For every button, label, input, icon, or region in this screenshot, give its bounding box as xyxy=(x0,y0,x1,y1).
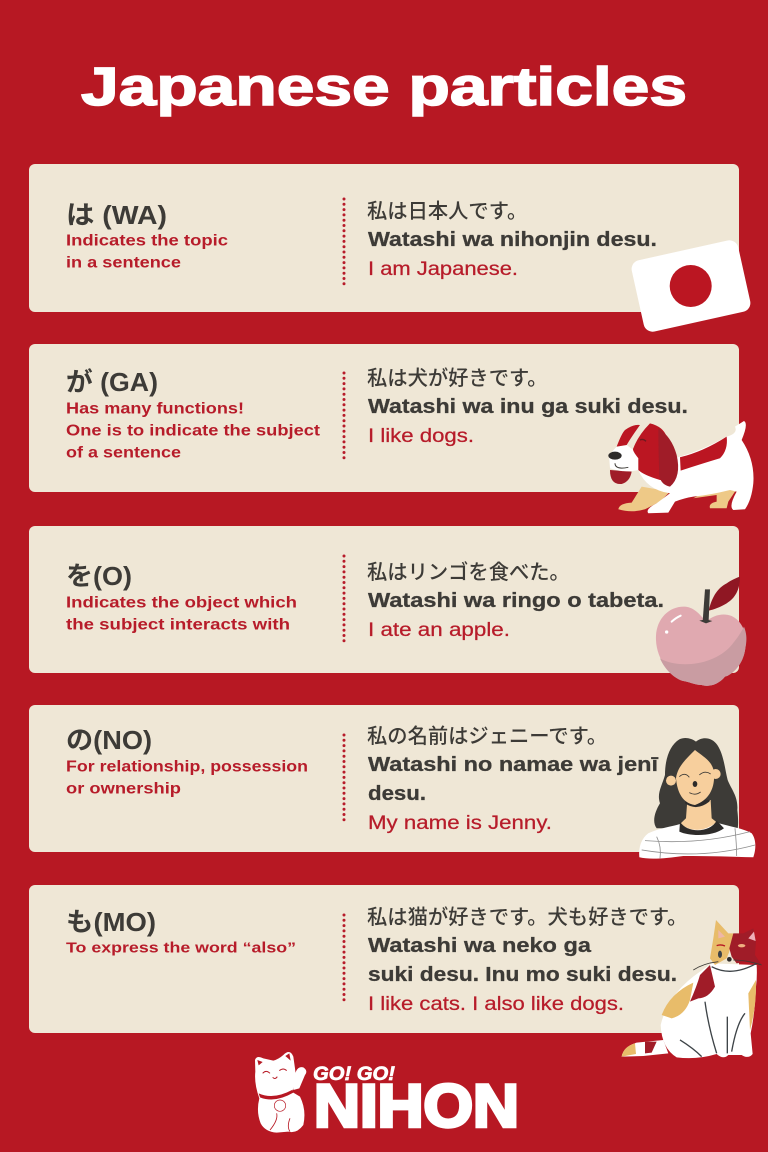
panel: ga particle xyxy=(29,344,739,492)
example: ga: Watashi wa inu ga suki desu. xyxy=(368,395,688,418)
example: o: 私はリンゴを食べた。 xyxy=(367,560,570,584)
description: o: Indicates the object which xyxy=(66,595,297,612)
example: o xyxy=(367,560,664,641)
example: no: Watashi no namae wa jenī xyxy=(368,753,658,776)
description: ga xyxy=(66,401,321,462)
example: wa: 私は日本人です。 xyxy=(367,200,527,223)
logo text: go go: GO! GO! xyxy=(313,1064,395,1085)
example: o: I ate an apple. xyxy=(368,619,510,641)
logo text: nihon: NIHON xyxy=(314,1072,519,1140)
description: o: the subject interacts with xyxy=(66,617,290,634)
description: ga: of a sentence xyxy=(66,445,181,462)
icon: woman xyxy=(639,738,755,859)
description: wa: in a sentence xyxy=(66,255,181,272)
title: Japanese particles xyxy=(81,57,687,117)
heading: no: の(NO) xyxy=(66,725,152,755)
description: ga: One is to indicate the subject xyxy=(66,423,321,440)
heading: wa: は (WA) xyxy=(66,200,167,230)
description: no: or ownership xyxy=(66,781,181,798)
example: ga xyxy=(367,367,688,447)
panel: mo particle xyxy=(29,885,739,1033)
example: wa: I am Japanese. xyxy=(368,258,518,280)
example: ga: I like dogs. xyxy=(368,425,474,447)
panel: no particle xyxy=(29,705,739,852)
example: mo xyxy=(367,906,687,1015)
example: no: My name is Jenny. xyxy=(368,812,552,834)
description: wa xyxy=(66,233,228,272)
logo: go go nihon xyxy=(255,1052,519,1140)
example: no xyxy=(367,725,658,834)
example: ga: 私は犬が好きです。 xyxy=(367,367,548,390)
icon: dog xyxy=(608,421,753,513)
panel: wa particle xyxy=(29,164,739,312)
icon: cat xyxy=(622,920,762,1058)
description: wa: Indicates the topic xyxy=(66,233,228,250)
description: no: For relationship, possession xyxy=(66,759,308,776)
icon: lucky cat xyxy=(255,1052,306,1133)
example: mo: I like cats. I also like dogs. xyxy=(368,993,624,1015)
example: no: desu. xyxy=(368,782,426,805)
example: o: Watashi wa ringo o tabeta. xyxy=(368,589,664,612)
description: no xyxy=(66,759,308,798)
icon: japan flag xyxy=(630,239,752,333)
example: mo: 私は猫が好きです。犬も好きです。 xyxy=(367,906,687,929)
heading: o: を(O) xyxy=(66,561,132,591)
example: mo: suki desu. Inu mo suki desu. xyxy=(368,963,677,986)
description: ga: Has many functions! xyxy=(66,401,244,418)
example: no: 私の名前はジェニーです。 xyxy=(367,725,607,748)
example: wa: Watashi wa nihonjin desu. xyxy=(368,228,657,251)
heading: ga: が (GA) xyxy=(66,367,158,397)
panel: o particle xyxy=(29,526,739,673)
description: o xyxy=(66,595,297,634)
example: wa xyxy=(367,200,657,280)
icon: apple xyxy=(656,577,746,686)
heading: mo: も(MO) xyxy=(66,907,156,937)
description: mo: To express the word “also” xyxy=(66,941,296,957)
example: mo: Watashi wa neko ga xyxy=(368,934,592,957)
